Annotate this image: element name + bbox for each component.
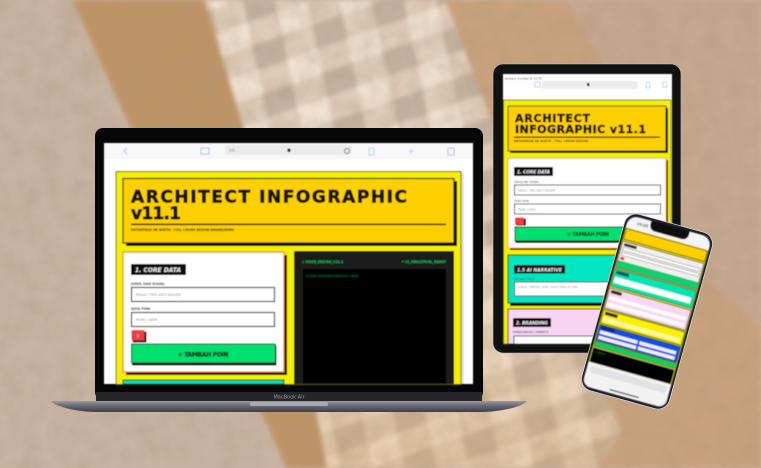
phone terminal (590, 347, 674, 384)
tablet field two: DATA POIN (514, 199, 529, 203)
phone terminal: // READY (595, 350, 607, 357)
device: tablet (493, 64, 681, 353)
preview status labels: • V1_INDUSTRIAL_READY (401, 260, 447, 264)
tablet field one (514, 180, 660, 195)
browser toolbar: AA (229, 148, 235, 153)
browser toolbar (104, 143, 473, 159)
console: // Siap menerima instruksi / data (306, 274, 358, 278)
phone page stack (588, 227, 709, 385)
tablet narrative heading (514, 265, 565, 274)
panel: teal narrative (cut off) (123, 380, 284, 384)
phone browser bar (582, 363, 671, 408)
tablet title: INFOGRAPHIC v11.1 (515, 123, 646, 136)
tablet branding heading: 2. BRANDING (516, 320, 548, 326)
title: v11.1 (131, 204, 181, 224)
tablet narrative heading: 1.5 AI NARRATIVE (517, 268, 563, 274)
tablet title: ARCHITECT (515, 112, 590, 125)
phone header (623, 228, 707, 262)
phone screen (582, 215, 712, 408)
tablet branding input: HANDLE/BLOG / WEBSITE (513, 330, 549, 334)
console (303, 269, 446, 384)
laptop lid and bezel (95, 128, 483, 400)
subtitle: ENTERPRISE 8K WIDTH · FULL I-BEAM DESIGN ENGINEERING (131, 228, 234, 232)
tablet add point button: + TAMBAH POIN (567, 232, 609, 238)
phone blue section (596, 324, 681, 362)
device: phone (579, 211, 715, 412)
tablet yellow frame (504, 100, 671, 344)
tablet field one: HEADLINE UTAMA (514, 180, 539, 184)
core data heading: 1. CORE DATA (135, 267, 181, 274)
panel: dark preview (294, 251, 454, 384)
tablet add point button (515, 227, 662, 243)
tablet core data heading: 1. CORE DATA (517, 170, 551, 176)
tablet browser bar (504, 76, 667, 89)
phone branding (604, 288, 691, 330)
laptop base (51, 401, 527, 412)
core data heading (131, 264, 186, 275)
phone yellow section (600, 309, 685, 345)
tablet body (493, 64, 681, 353)
title: ARCHITECT INFOGRAPHIC (131, 188, 407, 208)
tablet delete button (515, 218, 526, 226)
delete button (132, 330, 146, 342)
tablet panel: narrative (508, 255, 668, 306)
tablet core data heading (514, 167, 553, 176)
field: judul: MISAL: TIPS ANTI MAGER (136, 293, 181, 297)
tablet branding heading (513, 318, 551, 327)
field: judul: JUDUL DAN VISUAL (130, 282, 165, 286)
panel: core data (123, 252, 287, 375)
header panel (123, 178, 457, 246)
field: poin: POIN / DATA (136, 318, 158, 322)
laptop bottom strip with model name: MacBook Air (273, 394, 305, 400)
tablet browser bar: January Sunday at 13:35 (504, 76, 542, 80)
preview status labels: // MODE_DESIGN_V11.1 (302, 260, 343, 264)
phone narrative (611, 268, 696, 308)
phone body (579, 211, 715, 412)
phone notch (649, 221, 690, 241)
tablet branding input (513, 330, 660, 344)
add point button: + TAMBAH POIN (178, 352, 228, 358)
delete button: X (137, 334, 140, 338)
phone green bar (594, 341, 676, 368)
field: poin (131, 307, 274, 326)
tablet screen (503, 74, 672, 344)
yellow page frame (116, 172, 464, 384)
title (131, 188, 407, 224)
tablet narrative input: JUDUL, CERITA, ATAU DATA TEKS DI SINI (517, 285, 578, 289)
tablet panel: core data (508, 158, 668, 250)
tablet field two: POIN / DATA (518, 208, 537, 212)
laptop bottom strip with model name (96, 392, 482, 401)
tablet header panel (508, 106, 668, 153)
field: poin: DATA POIN (131, 307, 151, 311)
tablet panel: branding (508, 309, 666, 344)
field: judul (130, 282, 274, 302)
tablet field one: MISAL: TIPS ANTI MAGER (518, 188, 555, 192)
tablet narrative input (514, 277, 660, 296)
tablet narrative input: ARTIKEL/ TEKS (514, 277, 534, 281)
tablet header panel: ENTERPRISE 8K WIDTH · FULL I-BEAM DESIGN (514, 139, 589, 143)
browser toolbar: + (408, 147, 414, 156)
tablet title (515, 112, 646, 136)
preview status labels (302, 260, 447, 264)
laptop screen (104, 143, 473, 384)
tablet field two (514, 199, 660, 214)
phone time: 13:35 (637, 222, 649, 229)
add point button (132, 344, 276, 366)
phone core data (616, 241, 704, 289)
device: laptop (51, 128, 527, 412)
